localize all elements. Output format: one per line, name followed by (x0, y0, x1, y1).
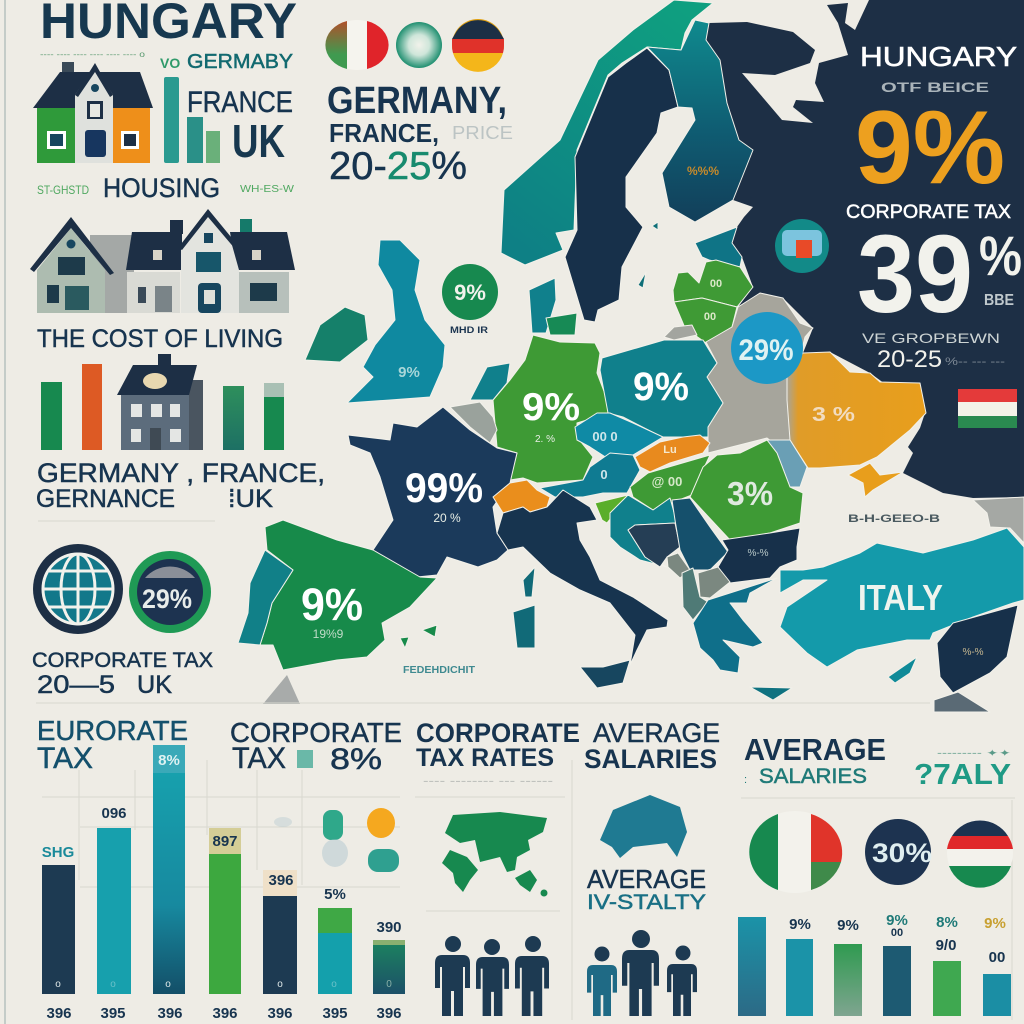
label: Germany rate: 9% (522, 386, 580, 429)
salary bar labels: 9/0 (936, 937, 956, 954)
heading: CORPORATE (230, 717, 402, 748)
label: Austria: 0 (600, 467, 608, 482)
badge: 9% on North Sea (442, 264, 498, 335)
map: Corsica (523, 567, 535, 597)
decorative label: ---- ---- ---- ---- ---- ---- o (40, 50, 146, 59)
label: Latvia: 00 (710, 278, 722, 290)
line 1: GERMANY, (327, 80, 507, 122)
map: Sweden (565, 48, 678, 322)
label: Poland rate: 9% (633, 365, 689, 409)
bar labels: 396 (157, 1005, 183, 1022)
text: 20-5: 20—5 (37, 671, 115, 699)
map of Europe (238, 0, 1024, 712)
subheading: OTF BEICE (881, 79, 989, 95)
subheading: SALARIES (759, 765, 867, 788)
icon: people (435, 936, 549, 1016)
icon: map (600, 795, 687, 858)
bar labels: 8% (158, 752, 180, 769)
badge: 30%: 30% (872, 838, 932, 868)
salary bar labels: 9% (886, 912, 908, 929)
label: Finland emblem: %%% (687, 164, 719, 178)
heading: Housing: HOUSING (103, 173, 220, 203)
icon: percentage ring (129, 551, 211, 633)
bar labels: 096 (101, 805, 127, 822)
heading: TAX (37, 742, 93, 775)
text: Italy: ?7ALY (914, 759, 1011, 791)
map: Slovakia (635, 435, 710, 472)
icon: small chip (297, 750, 313, 768)
label: Syria: %-% (962, 647, 984, 658)
bar labels: 390 (376, 919, 402, 936)
bar labels: SHG (42, 844, 74, 861)
big number: 9% (855, 90, 1005, 206)
badge: 29%: 29% (738, 334, 794, 367)
label: 20-25 (877, 346, 942, 373)
salary bar labels: 9% (984, 915, 1006, 932)
label: Ukraine rate: 3 % (812, 404, 855, 426)
flag: Hungary round (947, 820, 1013, 888)
text: France: FRANCE (187, 86, 293, 119)
map: Sicily (580, 660, 630, 688)
salary bar labels: 8% (936, 914, 958, 931)
left column (30, 0, 325, 699)
flag: Italy (325, 20, 389, 70)
bar labels: 395 (322, 1005, 348, 1022)
bar markers: o (165, 979, 171, 990)
map: Crete (750, 687, 792, 700)
label: Black Sea caption: B-H-GEEO-B (848, 513, 940, 525)
map: Turkey (780, 528, 1024, 667)
label: Italy over Turkey: ITALY (858, 577, 943, 618)
map: Greece (693, 578, 777, 673)
map: Balearic islands (400, 625, 437, 648)
map: Norway (501, 0, 713, 265)
map: France (348, 407, 517, 577)
label: Germany small: 2. % (535, 434, 555, 445)
decorative label: WH-ES-W (240, 184, 295, 195)
heading: HUNGARY (860, 41, 1017, 72)
map: Germany (493, 335, 610, 483)
flag: Italy round (749, 811, 842, 893)
map: Great Britain (347, 240, 445, 403)
heading: TAX (232, 742, 286, 775)
map: grey cape at bottom (263, 675, 300, 704)
bar labels: 396 (267, 1005, 293, 1022)
icon: green gem (396, 22, 442, 68)
salary bar labels: 00 (989, 949, 1005, 966)
map: Belarus (706, 293, 830, 467)
map: Slovenia (595, 495, 628, 523)
map: Austria (540, 453, 640, 497)
map: Kosovo and Montenegro (667, 553, 690, 578)
heading: Germany France 20-25% (327, 80, 513, 188)
icon: row of houses (30, 209, 295, 313)
text: corporate tax: CORPORATE TAX (32, 649, 213, 672)
salary bar labels: 9% (837, 917, 859, 934)
bar markers (55, 979, 392, 990)
panel: corporate tax rates (416, 718, 580, 1016)
text: vs Germany: VO (160, 55, 180, 71)
label: France small: 20 % (433, 511, 461, 525)
map: Portugal (238, 550, 293, 645)
text: UK: UK (232, 115, 285, 167)
flag: Germany (452, 19, 504, 72)
top flags (325, 19, 504, 72)
map: Netherlands (470, 363, 510, 400)
badge: 9% on North Sea: 9% (454, 280, 486, 305)
map: Crimea (848, 463, 903, 497)
map: Poland (600, 340, 723, 437)
map: Sardinia (513, 605, 535, 648)
label: UK rate: 9% (398, 364, 420, 381)
panel: European tax bars (37, 715, 405, 1022)
map: Serbia (672, 498, 728, 570)
text: Germany France: GERMANY , FRANCE, (37, 458, 325, 488)
bar labels: 396 (376, 1005, 402, 1022)
salary bar labels (789, 912, 1006, 966)
map: Ireland (305, 307, 368, 362)
map: Bulgaria (718, 528, 800, 583)
bar labels: 396 (46, 1005, 72, 1022)
line 2 faded: PRICE (452, 123, 513, 143)
panel text: Hungary headline (846, 41, 1022, 373)
bar labels: 396 (268, 872, 294, 889)
salary bars (738, 917, 1011, 1016)
badge: 9% on North Sea: MHD IR (450, 325, 489, 335)
map: Levant (934, 692, 990, 712)
map: Belgium (450, 402, 497, 443)
map: Kaliningrad (664, 325, 697, 340)
bar markers: o (277, 979, 283, 990)
bars (42, 745, 405, 994)
map: Romania (690, 440, 803, 540)
divider lines (36, 521, 1015, 1020)
heading: SALARIES (584, 744, 717, 774)
line 2: FRANCE, (329, 118, 439, 148)
panel: average salaries (584, 718, 720, 1016)
text: UK: UK (137, 671, 172, 699)
map: Croatia (610, 495, 677, 567)
bar markers: o (55, 979, 61, 990)
map: Moldova (767, 440, 807, 487)
label: Slovakia: Lu (663, 444, 677, 456)
bar markers: 0 (386, 979, 392, 990)
heading: EURORATE (37, 715, 188, 746)
label: Mediterranean caption: FEDEHDICHIT (403, 665, 475, 676)
label: Spain small: 19%9 (313, 627, 344, 641)
flag: Hungary small (958, 389, 1017, 428)
decorative label: ST-GHSTD (37, 183, 89, 197)
panel: corporate tax heading (230, 717, 402, 776)
label: France rate: 99% (405, 464, 483, 511)
panel: average salaries right (738, 732, 1013, 1016)
bar markers: o (331, 979, 337, 990)
icon: chart on dark panel (775, 219, 829, 273)
heading: AVERAGE (593, 718, 720, 748)
label: VE GROPBEWN (862, 330, 1000, 346)
label: Czechia: 00 0 (592, 429, 618, 444)
heading: 8%: 8% (330, 743, 382, 776)
map: Latvia (673, 260, 753, 307)
bar labels: 395 (100, 1005, 126, 1022)
line 3: 20-25% (329, 145, 467, 188)
bar markers: o (110, 979, 116, 990)
label: Bulgaria: %-% (747, 548, 769, 559)
map: Hungary (630, 455, 710, 510)
icon cluster (274, 808, 399, 872)
map: Albania (682, 568, 708, 620)
map: Swedish islands (638, 222, 658, 288)
heading: AVERAGE (744, 732, 886, 767)
label: Lithuania: 00 (704, 311, 716, 323)
map: Syria (937, 605, 1018, 693)
text: IV-stalty: IV-STALTY (587, 891, 706, 914)
subheading: : (744, 774, 747, 786)
icon: people (587, 930, 697, 1016)
text: average: AVERAGE (587, 864, 706, 894)
map: Czechia (575, 413, 663, 458)
label: Romania rate: 3% (727, 475, 773, 512)
text: UK: ⁞UK (228, 485, 273, 513)
label: Hungary: @ 00 (652, 474, 682, 489)
mini bars and house (41, 354, 284, 450)
badge: 30% (865, 819, 932, 885)
map: North Macedonia (698, 567, 730, 598)
map: Spain (260, 520, 437, 670)
map: Italy (497, 490, 668, 665)
salary bar labels: 9% (789, 916, 811, 933)
map: Bosnia (628, 523, 680, 567)
map: Denmark (529, 278, 556, 333)
label: Spain rate: 9% (301, 579, 363, 630)
big number: 39 (857, 213, 973, 336)
map labels (301, 164, 984, 676)
panel: dark northeast map panel (706, 0, 1024, 498)
icon: percentage ring: 29% (142, 584, 192, 614)
bar labels: 5% (324, 886, 346, 903)
bar labels: 396 (212, 1005, 238, 1022)
bar labels: 897 (212, 833, 238, 850)
left border line (4, 0, 6, 1024)
text: Gernance: GERNANCE (36, 485, 175, 513)
map: Cyprus (888, 657, 917, 683)
icon: world map (442, 812, 548, 896)
small note: BBE (984, 292, 1014, 309)
icon: globe (33, 544, 123, 634)
badge: 29% (731, 312, 803, 384)
decorative caption: ---- -------- --- ------ (423, 776, 553, 786)
map: Caucasus (973, 497, 1024, 543)
map: Lithuania (674, 298, 737, 343)
label: corporate tax: CORPORATE TAX (846, 202, 1011, 223)
map: Estonia (695, 227, 742, 267)
salary bar labels: 00 (891, 927, 903, 939)
map: Switzerland (493, 480, 550, 513)
text: vs Germany: GERMABY (187, 51, 293, 73)
decorative caption: --------- ✦✦ (937, 748, 1012, 758)
map: Finland (647, 20, 753, 222)
map: Ukraine (787, 352, 926, 468)
heading: cost of living: THE COST OF LIVING (37, 325, 283, 353)
bar labels (42, 752, 402, 1022)
label: %-- --- --- (945, 356, 1005, 368)
mini bars (164, 77, 220, 163)
bottom strip (37, 715, 1013, 1022)
icon: colourful house (33, 62, 153, 163)
heading: CORPORATE (416, 718, 580, 748)
heading: TAX RATES (416, 744, 554, 772)
